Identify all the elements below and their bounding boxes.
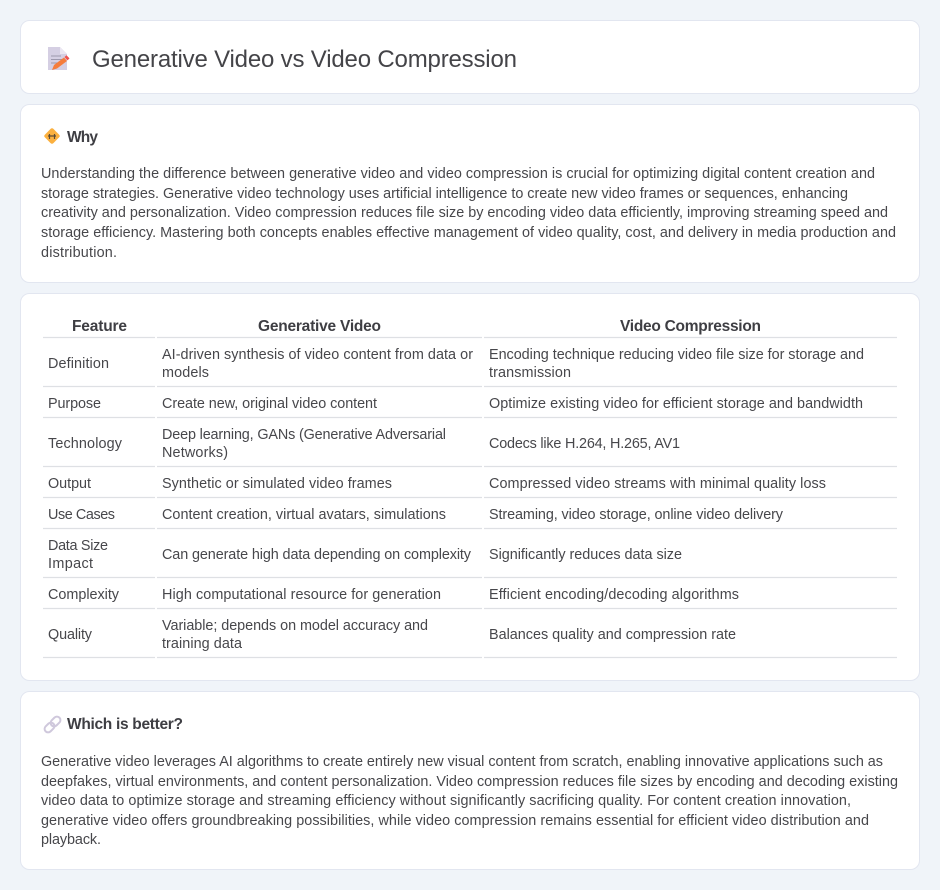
- panel: header: [20, 20, 920, 94]
- panel: which is better: [20, 692, 920, 870]
- text block: why: [41, 166, 896, 261]
- row: definition: Definition: [48, 356, 109, 372]
- row: technology: [43, 427, 897, 466]
- row: technology: Deep learning, GANs (Generative Adversarial: [162, 427, 446, 443]
- icon: warning diamond: [44, 128, 60, 144]
- table header: Generative Video: [258, 318, 381, 335]
- row: definition: AI-driven synthesis of video content from data or: [162, 347, 473, 363]
- text block: which is better: generative video offers groundbreaking possibilities, while video compression remains essential for efficient video distribution and: [41, 813, 869, 829]
- text block: why: distribution.: [41, 245, 117, 261]
- heading: which is better: Which is better?: [67, 716, 183, 733]
- text block: why: Understanding the difference between generative video and video compression is crucial for optimizing digital content creation and: [41, 166, 875, 182]
- icon: chain link: [43, 715, 62, 734]
- row: data size impact: Impact: [48, 556, 93, 572]
- row: technology: Codecs like H.264, H.265, AV1: [489, 436, 680, 452]
- row: definition: transmission: [489, 365, 571, 381]
- row: definition: models: [162, 365, 209, 381]
- icon: document with pencil: [48, 47, 70, 70]
- row: use cases: Content creation, virtual avatars, simulations: [162, 507, 446, 523]
- text block: which is better: [41, 754, 898, 848]
- row: quality: [43, 618, 897, 658]
- row: quality: Variable; depends on model accuracy and: [162, 618, 428, 634]
- row: output: [43, 476, 897, 498]
- row: complexity: Efficient encoding/decoding algorithms: [489, 587, 739, 603]
- row: technology: Technology: [48, 436, 123, 452]
- row: purpose: Create new, original video content: [162, 396, 377, 412]
- row: purpose: [43, 396, 897, 418]
- row: output: Output: [48, 476, 91, 492]
- text block: which is better: deepfakes, virtual environments, and content personalization. Video compression reduces file sizes by encoding and decoding existing: [41, 774, 898, 790]
- row: use cases: Use Cases: [48, 507, 115, 523]
- row: quality: training data: [162, 636, 242, 652]
- row: data size impact: Can generate high data depending on complexity: [162, 547, 472, 563]
- table header: Feature: [72, 318, 127, 335]
- table header: Video Compression: [620, 318, 761, 335]
- text block: why: storage efficiency. Mastering both concepts enables effective management of video quality, cost, and delivery in media production and: [41, 225, 896, 241]
- row: output: Synthetic or simulated video frames: [162, 476, 392, 492]
- row: quality: Balances quality and compression rate: [489, 627, 736, 643]
- row: complexity: Complexity: [48, 587, 120, 603]
- row: purpose: Purpose: [48, 396, 101, 412]
- row: data size impact: [43, 538, 897, 578]
- row: definition: Encoding technique reducing video file size for storage and: [489, 347, 864, 363]
- row: complexity: High computational resource for generation: [162, 587, 441, 603]
- text block: which is better: playback.: [41, 832, 101, 848]
- title: Generative Video vs Video Compression: [92, 46, 517, 73]
- row: complexity: [43, 587, 897, 608]
- text block: which is better: video data to optimize storage and streaming efficiency without significantly sacrificing quality. For content creation innovation,: [41, 793, 851, 809]
- row: data size impact: Data Size: [48, 538, 108, 554]
- row: quality: Quality: [48, 627, 93, 643]
- text block: which is better: Generative video leverages AI algorithms to create entirely new visual content from scratch, enabling innovative applications such as: [41, 754, 883, 770]
- row: technology: Networks): [162, 445, 228, 461]
- row: use cases: Streaming, video storage, online video delivery: [489, 507, 784, 523]
- text block: why: storage strategies. Generative video technology uses artificial intelligence to create new video frames or sequences, enhancing: [41, 186, 848, 202]
- row: use cases: [43, 507, 897, 528]
- row: output: Compressed video streams with minimal quality loss: [489, 476, 826, 492]
- row: purpose: Optimize existing video for efficient storage and bandwidth: [489, 396, 863, 412]
- row: definition: [43, 347, 897, 386]
- row: data size impact: Significantly reduces data size: [489, 547, 682, 563]
- heading: why: Why: [67, 129, 98, 146]
- panel: comparison table: [20, 294, 920, 680]
- panel: why: [20, 104, 920, 282]
- text block: why: creativity and personalization. Video compression reduces file size by encoding video data efficiently, improving streaming speed and: [41, 205, 888, 221]
- table header: [43, 318, 897, 338]
